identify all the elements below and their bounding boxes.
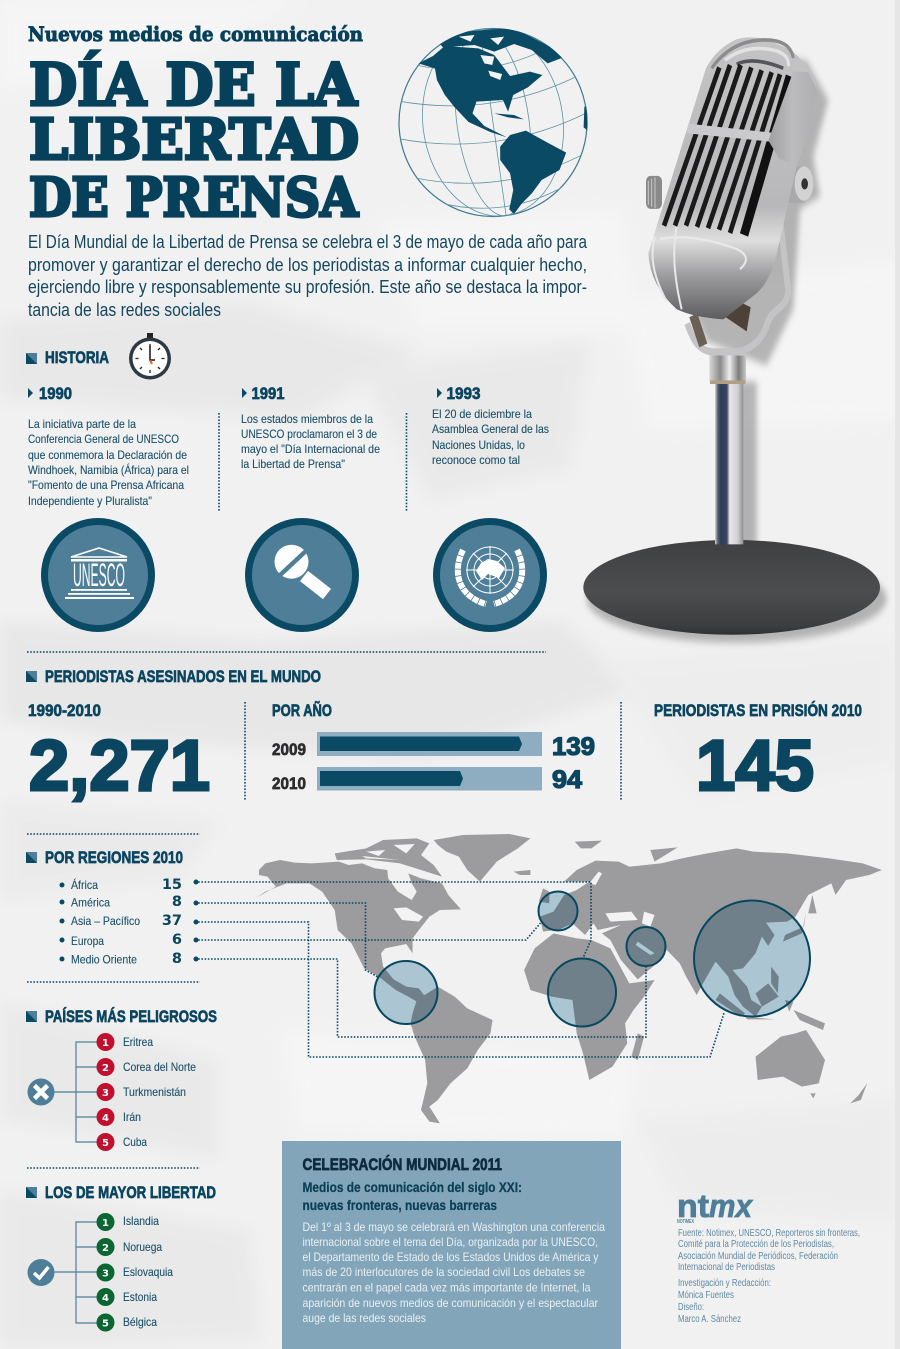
region list: Europa xyxy=(71,934,104,948)
logo: notimex xyxy=(677,1188,753,1225)
logo: notimex: NOTIMEX xyxy=(677,1219,694,1225)
region list: África xyxy=(71,877,98,892)
ranking: free countries: 4 xyxy=(102,1293,109,1304)
timeline: 1990 xyxy=(28,384,189,508)
heading: los de mayor libertad: LOS DE MAYOR LIBERTAD xyxy=(45,1183,216,1202)
section: países más peligrosos xyxy=(26,1007,217,1151)
bubble: áfrica xyxy=(548,958,616,1026)
ranking: dangerous countries: Eritrea xyxy=(123,1035,153,1049)
panel subheading: Medios de comunicación del siglo XXI: xyxy=(302,1179,522,1195)
intro text: promover y garantizar el derecho de los periodistas a informar cualquier hecho, xyxy=(28,255,587,275)
ranking: free countries: Noruega xyxy=(123,1240,162,1254)
credits: Internacional de Periodistas xyxy=(678,1262,775,1273)
panel body: el Departamento de Estado de los Estados Unidos de América y xyxy=(302,1250,598,1264)
region list: 8 xyxy=(172,894,182,910)
timeline: 1991: la Libertad de Prensa" xyxy=(241,457,345,471)
mic base xyxy=(583,540,880,635)
ranking: dangerous countries: 4 xyxy=(102,1113,109,1124)
mic top ribs xyxy=(712,40,793,68)
heading: historia xyxy=(26,348,109,367)
panel body: aparición de nuevos medios de comunicación y el espectacular xyxy=(302,1296,598,1310)
timeline: 1991: UNESCO proclamaron el 3 de xyxy=(241,427,377,441)
stat: periodistas en prisión: 145 xyxy=(696,727,814,806)
bar: 2010 xyxy=(272,766,582,794)
panel body: internacional sobre el tema del Día, organizada por la UNESCO, xyxy=(302,1235,598,1249)
heading: periodistas asesinados: PERIODISTAS ASESINADOS EN EL MUNDO xyxy=(45,667,321,686)
ranking: free countries: 1 xyxy=(102,1218,109,1229)
bar chart: por año: POR AÑO xyxy=(272,700,332,720)
ranking: dangerous countries: Corea del Norte xyxy=(123,1060,196,1074)
bar: 2010: 94 xyxy=(552,766,582,794)
panel heading: CELEBRACIÓN MUNDIAL 2011 xyxy=(302,1155,502,1174)
region list: Medio Oriente xyxy=(71,952,137,966)
ranking: free countries: Estonia xyxy=(123,1290,157,1304)
ranking: dangerous countries: Turkmenistán xyxy=(123,1085,186,1099)
stat: periodistas en prisión xyxy=(654,701,862,806)
region list xyxy=(60,877,182,967)
ranking: free countries: Eslovaquia xyxy=(123,1265,173,1279)
region list: 6 xyxy=(172,932,182,948)
timeline: 1993: El 20 de diciembre la xyxy=(432,407,532,421)
region list: 37 xyxy=(162,913,182,929)
ranking: dangerous countries xyxy=(96,1033,196,1151)
section: los de mayor libertad xyxy=(26,1183,216,1332)
stat: 1990-2010 total: 1990-2010 xyxy=(28,701,101,720)
timeline: 1990: 1990 xyxy=(39,384,72,403)
ranking: dangerous countries: Irán xyxy=(123,1110,141,1124)
icon: microphone xyxy=(245,518,359,632)
panel body xyxy=(302,1220,605,1325)
bubble: europa xyxy=(538,892,578,930)
timeline: 1991 xyxy=(241,384,380,471)
ranking: free countries: Islandia xyxy=(123,1214,159,1228)
timeline: 1990: Conferencia General de UNESCO xyxy=(28,432,179,446)
ranking: free countries xyxy=(96,1213,173,1332)
icon: unesco temple: UNESCO xyxy=(73,557,125,593)
ranking: dangerous countries: 3 xyxy=(102,1088,109,1099)
bar: 2010: 2010 xyxy=(272,774,306,793)
ranking: free countries: Bélgica xyxy=(123,1315,157,1329)
section: por regiones xyxy=(26,848,183,967)
panel body: Del 1º al 3 de mayo se celebrará en Washington una conferencia xyxy=(302,1220,605,1234)
bar chart: por año xyxy=(272,700,595,794)
globe illustration xyxy=(398,28,588,218)
icon: unesco temple xyxy=(41,518,155,632)
mic body xyxy=(648,37,817,319)
microphone photo illustration xyxy=(583,37,887,643)
credits: Mónica Fuentes xyxy=(678,1290,734,1301)
title: DE PRENSA xyxy=(29,167,359,229)
logo: notimex: nt xyxy=(677,1188,709,1224)
timeline: 1990: que conmemora la Declaración de xyxy=(28,448,187,462)
credits: Diseño: xyxy=(678,1302,704,1313)
ranking: free countries: 3 xyxy=(102,1268,109,1280)
ranking: dangerous countries: 5 xyxy=(102,1138,109,1149)
panel subheading xyxy=(302,1179,522,1213)
timeline: 1990: "Fomento de una Prensa Africana xyxy=(28,478,184,492)
ranking: free countries: 2 xyxy=(102,1243,109,1254)
mic grill xyxy=(664,65,790,235)
credits: Comité para la Protección de los Periodistas, xyxy=(678,1239,834,1250)
panel subheading: nuevas fronteras, nuevas barreras xyxy=(302,1197,497,1213)
timeline: 1990: La iniciativa parte de la xyxy=(28,417,136,431)
bar: 2009: 2009 xyxy=(272,740,306,759)
panel body: auge de las redes sociales xyxy=(302,1311,426,1325)
bar: 2009: 139 xyxy=(552,733,595,761)
mic shadow xyxy=(587,56,887,643)
region list: 8 xyxy=(172,951,182,967)
mic pole xyxy=(709,356,746,544)
region list: América xyxy=(71,896,110,910)
ranking: dangerous countries: 2 xyxy=(102,1063,109,1074)
timeline: 1991: mayo el "Día Internacional de xyxy=(241,442,380,456)
credits xyxy=(678,1228,860,1325)
subtitle: Nuevos medios de comunicación xyxy=(28,22,363,46)
intro text: tancia de las redes sociales xyxy=(28,300,221,320)
timeline: 1990: Independiente y Pluralista" xyxy=(28,494,152,508)
credits: Marco A. Sánchez xyxy=(678,1314,741,1325)
logo: notimex: mx xyxy=(709,1188,753,1224)
bubble: américa xyxy=(374,961,438,1024)
region list: Asia – Pacífico xyxy=(71,914,140,928)
mic side plate xyxy=(768,71,817,165)
bubble: asia pacífico xyxy=(694,900,810,1016)
section: periodistas asesinados xyxy=(26,667,862,806)
mic knobs xyxy=(646,166,813,209)
icon: check xyxy=(28,1259,54,1286)
intro text: ejerciendo libre y responsablemente su profesión. Este año se destaca la impor- xyxy=(28,277,587,297)
panel body: más de 20 interlocutores de la sociedad civil Los debates se xyxy=(302,1265,585,1279)
timeline: 1993: 1993 xyxy=(446,384,480,403)
timeline: 1993: Naciones Unidas, lo xyxy=(432,438,525,452)
panel: celebración mundial 2011 xyxy=(282,1141,621,1349)
timeline: 1993 xyxy=(432,384,549,467)
mic yoke xyxy=(687,171,793,352)
ranking: dangerous countries: Cuba xyxy=(123,1135,147,1149)
timeline: 1991: 1991 xyxy=(252,384,284,403)
heading: por regiones: POR REGIONES 2010 xyxy=(45,848,183,867)
ranking: free countries: 5 xyxy=(102,1318,109,1330)
region list: 15 xyxy=(162,877,182,893)
title xyxy=(29,51,359,229)
ranking: dangerous countries: 1 xyxy=(102,1038,109,1049)
intro text xyxy=(28,232,588,320)
icon: united nations emblem xyxy=(433,518,547,632)
world map xyxy=(194,834,882,1123)
bubble: medio oriente xyxy=(626,927,666,966)
icon: cross xyxy=(28,1078,54,1106)
panel body: centrarán en el papel cada vez más importante de Internet, la xyxy=(302,1280,591,1294)
heading: historia: HISTORIA xyxy=(45,348,109,367)
timeline: 1993: reconoce como tal xyxy=(432,453,520,467)
intro text: El Día Mundial de la Libertad de Prensa se celebra el 3 de mayo de cada año para xyxy=(28,232,588,252)
title: LIBERTAD xyxy=(29,107,359,173)
title: DÍA DE LA xyxy=(29,51,358,119)
timeline: 1990: Windhoek, Namibia (África) para el xyxy=(28,462,189,477)
heading: países más peligrosos: PAÍSES MÁS PELIGROSOS xyxy=(45,1007,217,1026)
credits: Asociación Mundial de Periódicos, Federación xyxy=(678,1251,838,1262)
credits: Investigación y Redacción: xyxy=(678,1278,771,1289)
connector lines xyxy=(194,880,724,1057)
timeline: 1991: Los estados miembros de la xyxy=(241,412,373,426)
section: historia xyxy=(26,333,549,632)
bar: 2009 xyxy=(272,732,595,761)
stat: 1990-2010 total: 2,271 xyxy=(29,727,210,806)
icon: stopwatch xyxy=(129,333,171,380)
timeline: 1993: Asamblea General de las xyxy=(432,422,549,436)
